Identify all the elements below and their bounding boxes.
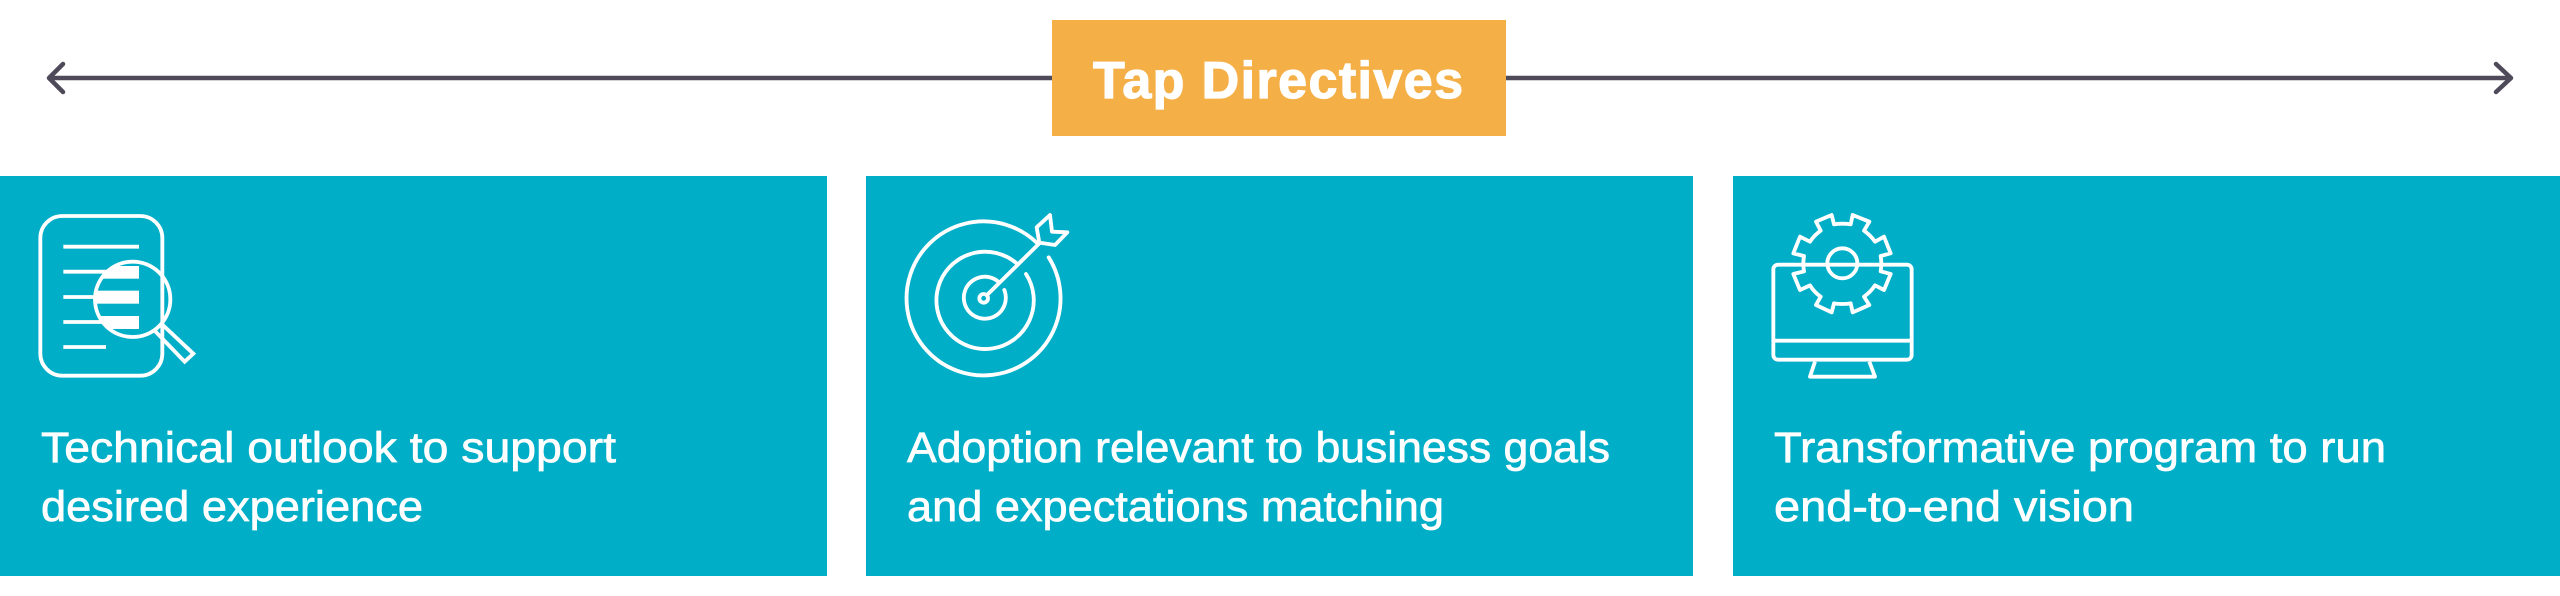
panel: technical outlook: [0, 176, 827, 576]
text: technical outlook: Technical outlook to support: [41, 424, 616, 472]
icon: target with arrow: [907, 215, 1067, 375]
panel: transformative program: [1733, 176, 2560, 576]
text: transformative program: Transformative program to run: [1774, 424, 2386, 472]
text: technical outlook: desired experience: [41, 483, 423, 531]
title badge: [1052, 20, 1506, 136]
panel: adoption: [866, 176, 1693, 576]
text: transformative program: end-to-end vision: [1774, 483, 2134, 531]
text: adoption: and expectations matching: [907, 483, 1444, 531]
double-headed arrow: left: [49, 64, 1052, 92]
text: adoption: Adoption relevant to business goals: [907, 424, 1610, 472]
double-headed arrow: right: [1506, 64, 2511, 92]
icon: monitor with gear: [1773, 215, 1912, 377]
title: Tap Directives: [1093, 52, 1464, 110]
icon: document with magnifier: [40, 216, 193, 376]
